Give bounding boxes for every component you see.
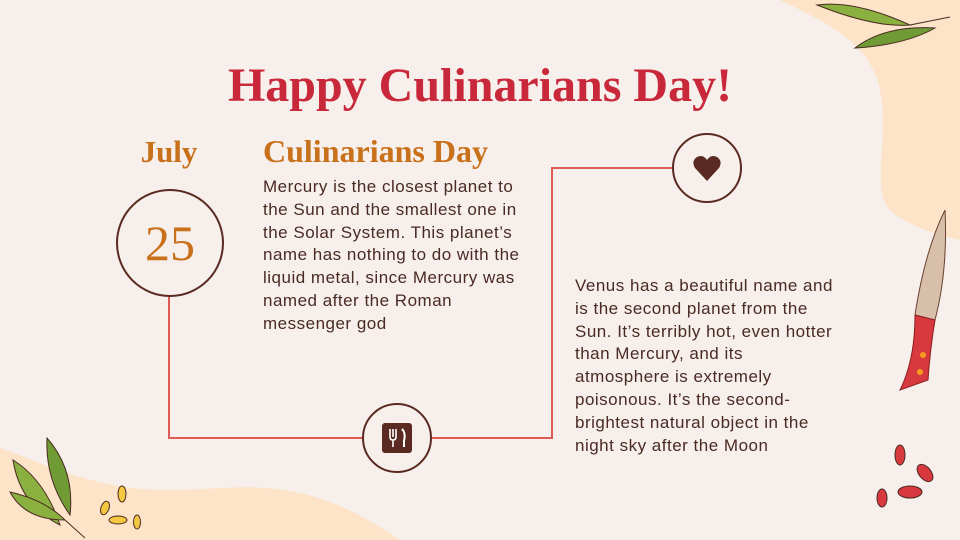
text block left: messenger god xyxy=(263,314,387,333)
decoration: leaves bottom left xyxy=(9,436,85,538)
text block left: name has nothing to do with the xyxy=(263,245,520,264)
text block right: poisonous. It’s the second- xyxy=(575,390,790,409)
icon: heart circle xyxy=(672,133,742,203)
text block left: named after the Roman xyxy=(263,291,452,310)
title: Happy Culinarians Day! xyxy=(228,59,732,112)
text block right: brightest natural object in the xyxy=(575,413,809,432)
text block right: atmosphere is extremely xyxy=(575,367,772,386)
text block left: Mercury is the closest planet to xyxy=(263,177,513,196)
text block right: night sky after the Moon xyxy=(575,436,768,455)
text block left: the Sun and the smallest one in xyxy=(263,200,517,219)
heading: Culinarians Day: Culinarians Day xyxy=(263,133,488,169)
text block left xyxy=(263,177,520,333)
date circle xyxy=(116,189,224,297)
text block right: than Mercury, and its xyxy=(575,344,743,363)
decoration: yellow seeds xyxy=(100,486,141,530)
text block right: is the second planet from the xyxy=(575,299,808,318)
text block right: Sun. It’s terribly hot, even hotter xyxy=(575,322,832,341)
text block left: liquid metal, since Mercury was xyxy=(263,268,515,287)
text block right: Venus has a beautiful name and xyxy=(575,276,833,295)
month label: July xyxy=(141,134,197,169)
decoration: leaves top right xyxy=(815,4,950,49)
icon: cutlery circle xyxy=(362,403,432,473)
decoration: red beans xyxy=(876,444,934,508)
decoration: knife xyxy=(899,210,946,391)
text block right xyxy=(575,276,833,455)
date circle: 25 xyxy=(145,215,195,271)
text block left: the Solar System. This planet’s xyxy=(263,223,512,242)
